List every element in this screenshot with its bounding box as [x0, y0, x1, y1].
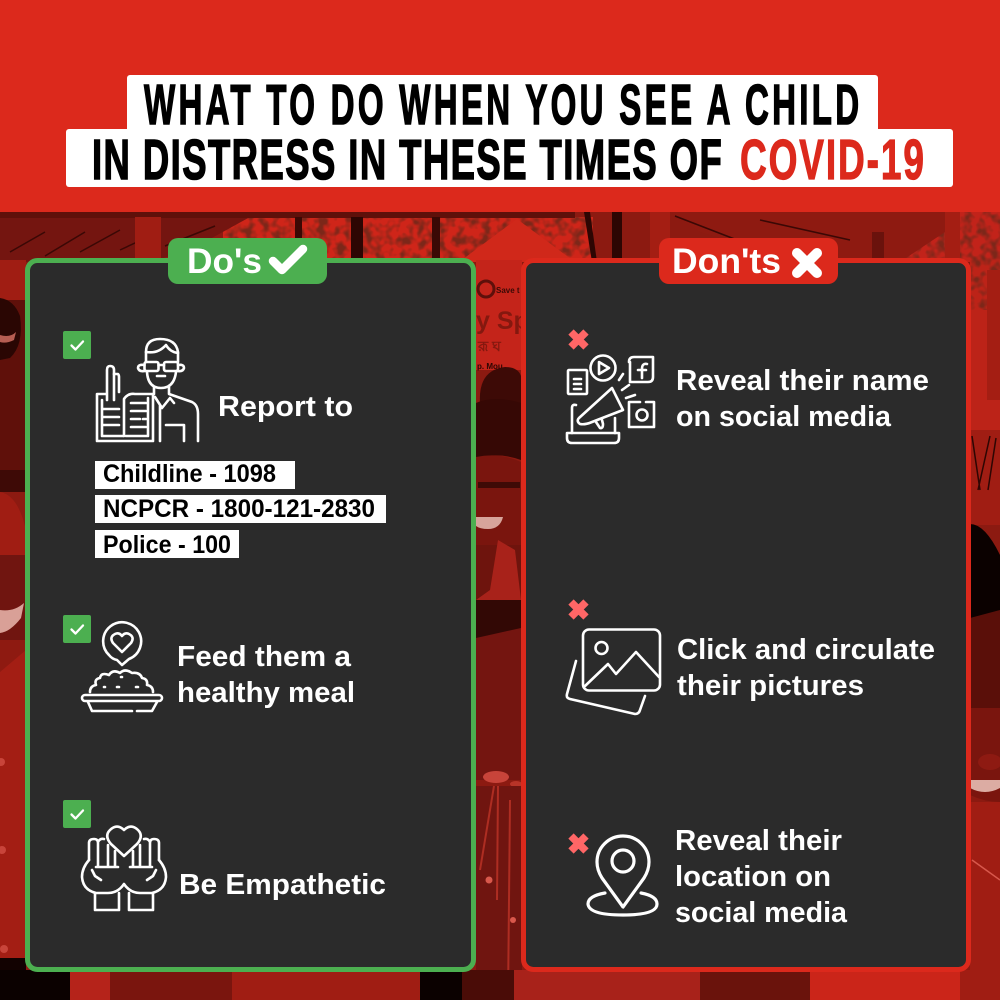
text: report to: Report to	[218, 391, 353, 423]
title: COVID-19	[740, 128, 924, 192]
icon: pictures	[567, 630, 660, 714]
top banner	[0, 0, 1000, 212]
roof right	[670, 212, 945, 262]
do's tab	[168, 238, 327, 284]
bottom strip	[0, 970, 1000, 1000]
helpline: police: Police - 100	[103, 531, 231, 559]
text: click and circulate: Click and circulate	[677, 634, 935, 666]
do's tab: Do's	[187, 242, 262, 281]
cross: pictures	[571, 602, 586, 617]
thatch	[459, 219, 575, 262]
helpline: ncpcr: NCPCR - 1800-121-2830	[103, 495, 375, 523]
panel: do's	[28, 238, 474, 970]
icon: teacher with book	[97, 339, 198, 441]
text: feed them: healthy meal	[177, 677, 355, 709]
text: click and circulate	[677, 634, 935, 702]
text: reveal location: Reveal their	[675, 825, 842, 857]
right strip	[970, 260, 1000, 1000]
roof left	[0, 217, 250, 262]
don'ts tab: Don'ts	[672, 242, 781, 281]
left strip	[0, 260, 26, 1000]
icon: location pin	[588, 836, 657, 915]
don'ts tab	[659, 238, 838, 284]
text: reveal name	[676, 365, 929, 433]
cross: location	[571, 836, 586, 851]
title: IN DISTRESS IN THESE TIMES OF	[92, 129, 722, 192]
text: reveal name: Reveal their name	[676, 365, 929, 397]
background photo	[0, 212, 1000, 1000]
text: reveal name: on social media	[676, 401, 892, 433]
middle strip: রূ ঘ	[477, 338, 502, 354]
text: click and circulate: their pictures	[677, 670, 864, 702]
text: feed them: Feed them a	[177, 641, 352, 673]
text: be empathetic: Be Empathetic	[179, 869, 386, 901]
check: empathy	[63, 800, 91, 828]
icon: meal bowl with heart	[82, 622, 162, 711]
cross: social media	[571, 332, 586, 347]
middle strip: Save t	[496, 286, 520, 295]
check: feed	[63, 615, 91, 643]
panel: don'ts	[524, 238, 968, 970]
helpline: childline: Childline - 1098	[103, 460, 276, 488]
middle strip: y Sp	[476, 307, 529, 335]
check: report	[63, 331, 91, 359]
middle strip	[476, 260, 529, 1000]
foliage	[223, 212, 1000, 262]
text: reveal location	[675, 825, 848, 929]
text: reveal location: social media	[675, 897, 848, 929]
icon: social media megaphone	[567, 356, 654, 443]
title: WHAT TO DO WHEN YOU SEE A CHILD	[144, 73, 859, 136]
text: reveal location: location on	[675, 861, 831, 893]
title	[66, 73, 953, 192]
text: feed them	[177, 641, 355, 709]
middle strip: p. Mou	[477, 362, 503, 371]
icon: hands holding heart	[82, 826, 166, 910]
